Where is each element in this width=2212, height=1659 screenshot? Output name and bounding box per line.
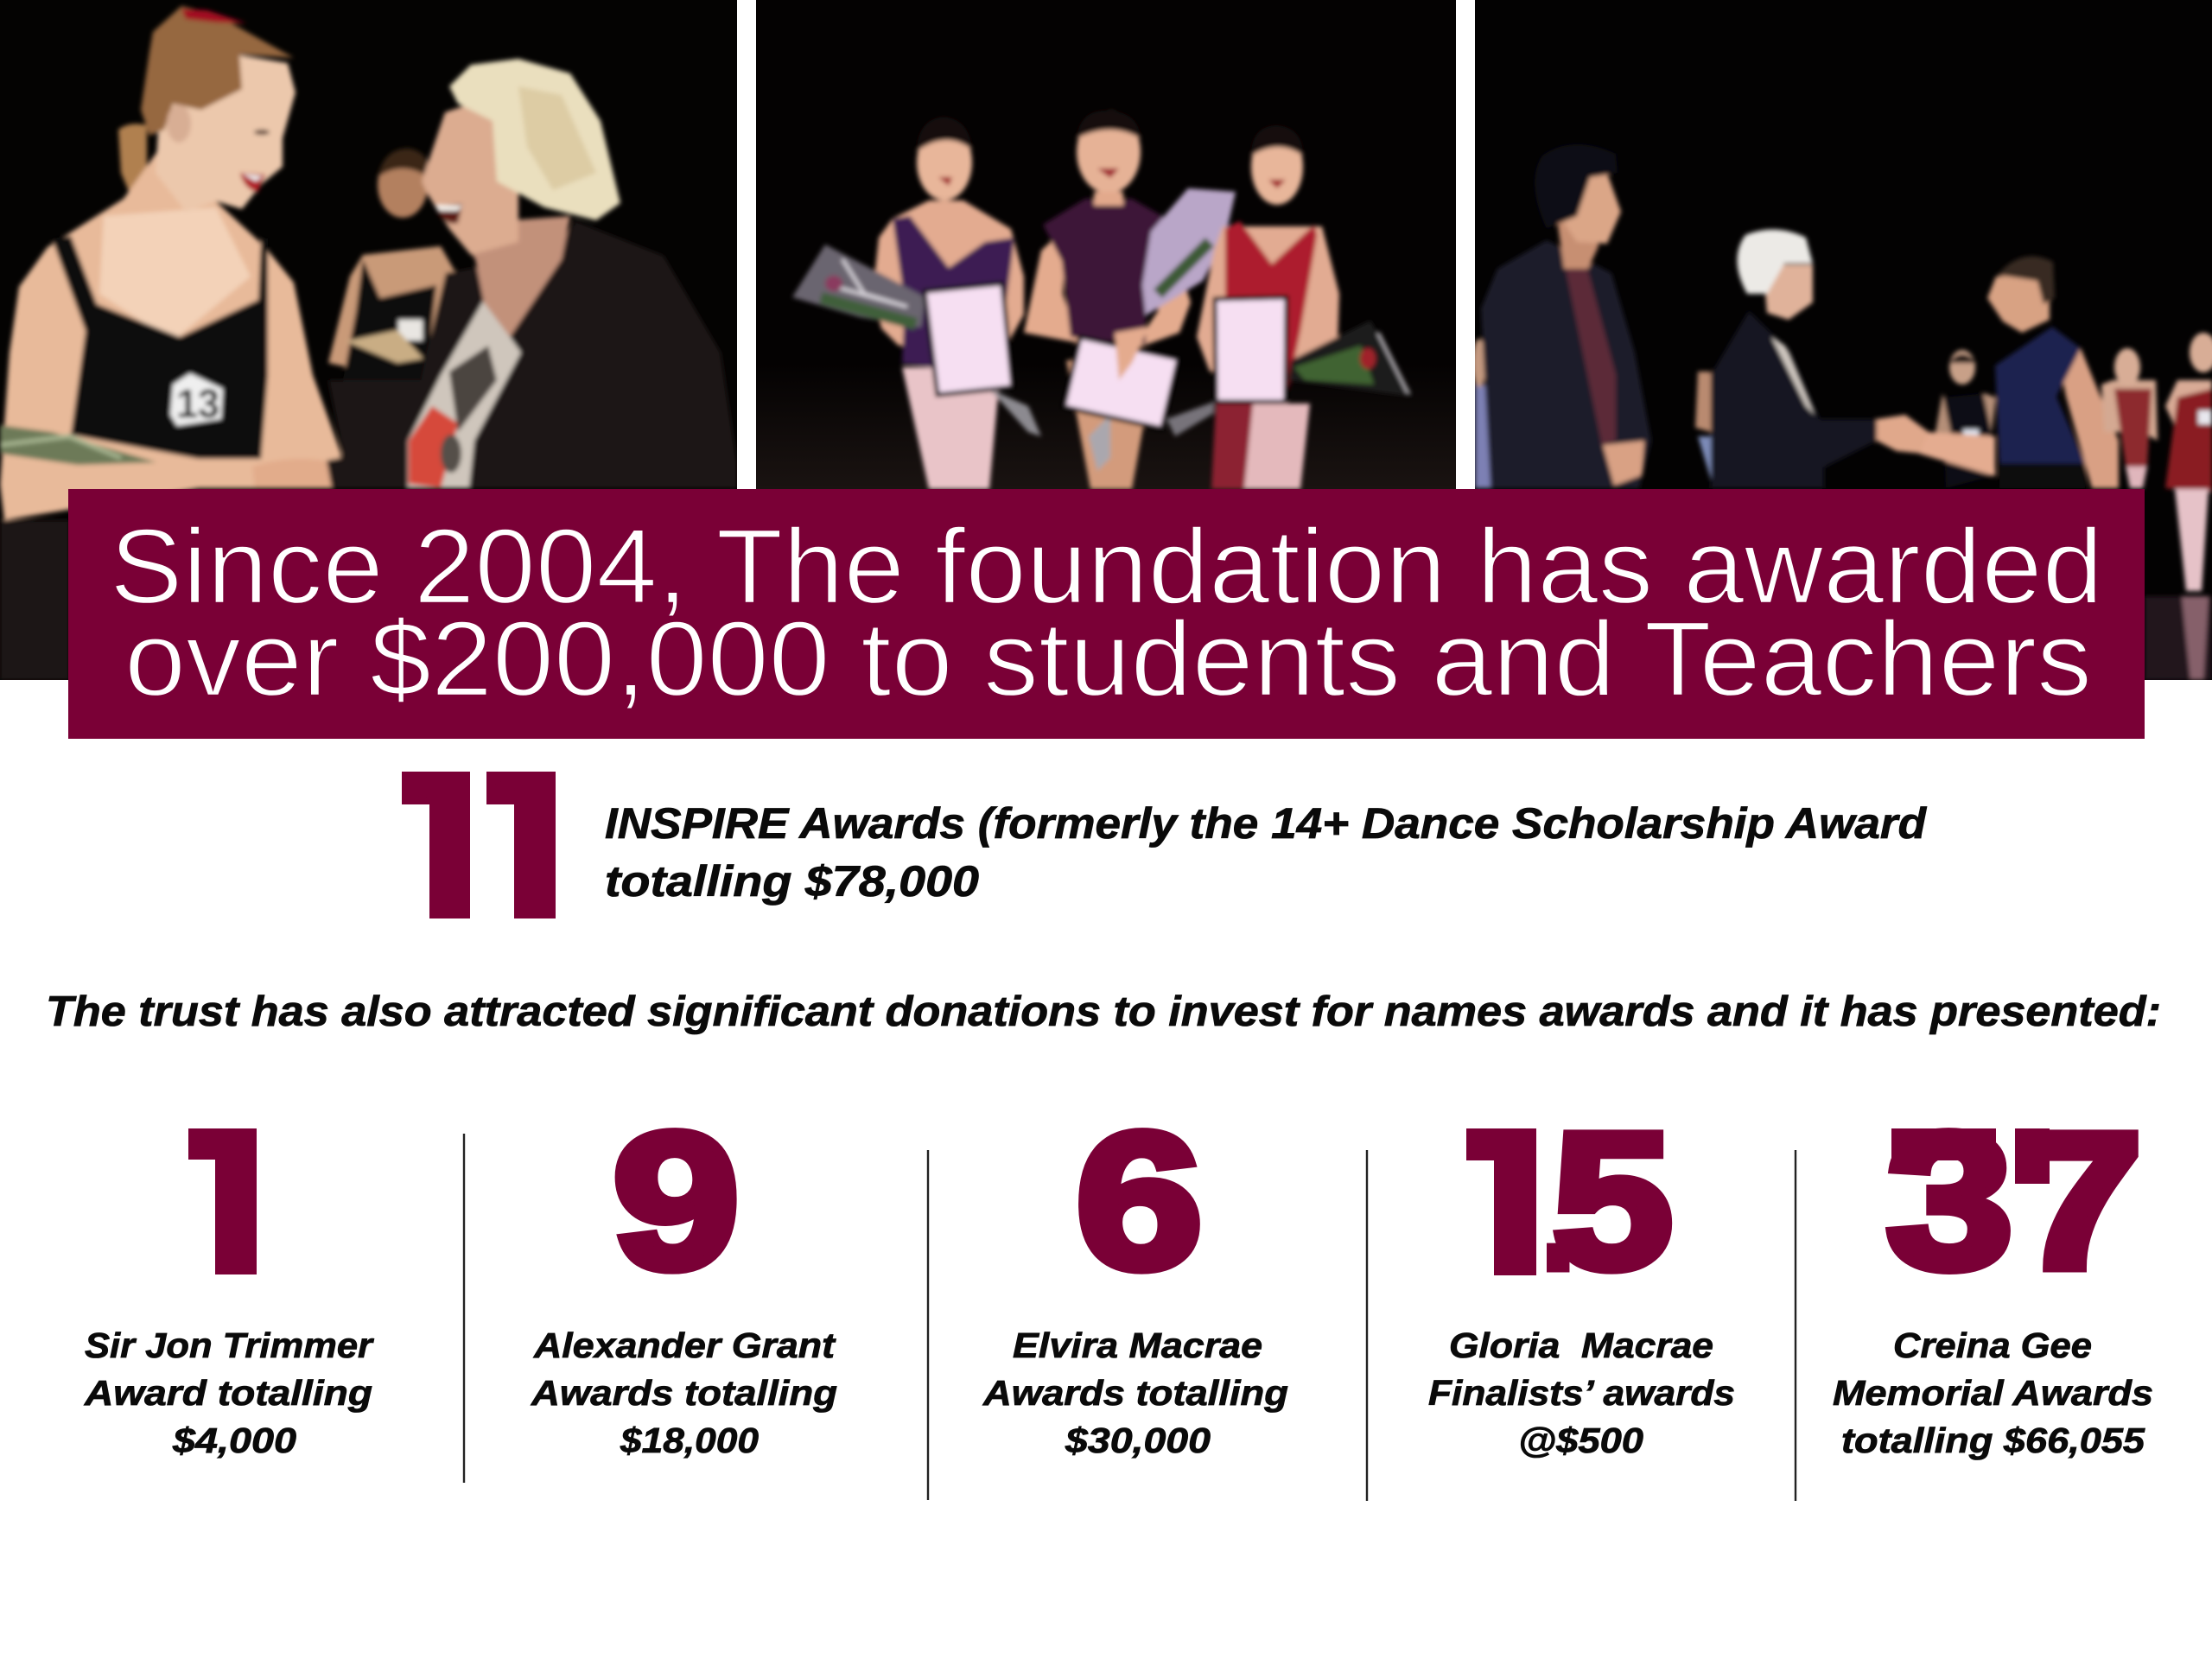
handshake xyxy=(1877,415,1929,454)
stat: Creina Gee: Creina Gee xyxy=(1893,1325,2092,1365)
stat: Alexander Grant: 9 xyxy=(613,1092,740,1309)
woman presenter xyxy=(1711,230,1877,488)
stat: Sir Jon Trimmer: $4,000 xyxy=(172,1421,296,1460)
stat: Sir Jon Trimmer: 1 xyxy=(167,1092,294,1309)
dancer black leotard xyxy=(52,236,268,459)
stat: Creina Gee: totalling $66,055 xyxy=(1841,1421,2145,1460)
photo: handshake on stage xyxy=(1472,0,2212,680)
headline xyxy=(110,508,2103,719)
certificate middle xyxy=(1064,337,1179,429)
elderly woman face xyxy=(422,99,518,255)
certificate left xyxy=(925,283,1013,395)
background dancer behind left xyxy=(118,124,147,194)
stat: Alexander Grant xyxy=(531,1092,837,1460)
stage floor reflection xyxy=(2145,596,2212,680)
elderly woman cardigan xyxy=(327,220,737,488)
dancer body xyxy=(0,138,341,520)
stat: Elvira Macrae: Awards totalling xyxy=(982,1373,1288,1413)
headline: over $200,000 to students and Teachers xyxy=(124,601,2092,719)
background dancer in black xyxy=(328,149,458,467)
stat: Creina Gee: 37 xyxy=(1886,1092,2143,1309)
stat: Elvira Macrae: Elvira Macrae xyxy=(1013,1325,1262,1365)
bouquet right xyxy=(1288,321,1413,397)
lower skirt xyxy=(0,520,69,680)
stat: Sir Jon Trimmer xyxy=(84,1092,374,1460)
stat: Alexander Grant: Awards totalling xyxy=(531,1373,837,1413)
stat: Sir Jon Trimmer: Sir Jon Trimmer xyxy=(85,1325,374,1365)
stat: Gloria Macrae: Finalists’ awards xyxy=(1428,1373,1735,1413)
hand on certificate xyxy=(1115,327,1149,380)
inspire awards text xyxy=(605,799,1928,906)
background dancer in black xyxy=(1936,350,1996,488)
stat: Sir Jon Trimmer: Award totalling xyxy=(84,1373,372,1413)
stat: Gloria Macrae xyxy=(1428,1093,1735,1460)
blouse xyxy=(408,300,521,488)
big number 11: 11 xyxy=(381,736,593,953)
white hair xyxy=(449,59,620,220)
stat: Alexander Grant: Alexander Grant xyxy=(533,1325,837,1365)
neck xyxy=(450,216,570,337)
right dancer xyxy=(1197,125,1339,489)
dancer face and hair xyxy=(156,54,296,212)
stat: Elvira Macrae: $30,000 xyxy=(1065,1421,1211,1460)
inspire awards text: INSPIRE Awards (formerly the 14+ Dance Scholarship Award xyxy=(605,799,1928,848)
certificate right xyxy=(1215,297,1287,402)
stat: Elvira Macrae xyxy=(982,1092,1288,1460)
man in suit xyxy=(1481,144,1651,488)
background dancers in red xyxy=(2101,333,2212,591)
stat: Elvira Macrae: 6 xyxy=(1076,1092,1203,1309)
trust statement: The trust has also attracted significant donations to invest for names awards and it has presented: xyxy=(46,988,2161,1035)
young man xyxy=(1987,257,2119,488)
stat: Gloria Macrae: @$500 xyxy=(1518,1421,1643,1460)
middle dancer xyxy=(1024,111,1236,489)
photo: young dancer and elderly patron laughing xyxy=(0,0,737,680)
banner xyxy=(68,489,2145,739)
left dancer xyxy=(792,117,1041,489)
photo: three dancers with certificates xyxy=(756,0,1456,489)
stat: Gloria Macrae: Gloria Macrae xyxy=(1449,1325,1713,1365)
stat: Gloria Macrae: 15 xyxy=(1450,1093,1673,1309)
bouquet stems xyxy=(0,425,156,465)
stat: Creina Gee: Memorial Awards xyxy=(1833,1373,2153,1413)
number tag: 13 xyxy=(176,381,219,426)
stat: Creina Gee xyxy=(1833,1092,2153,1460)
stat: Alexander Grant: $18,000 xyxy=(620,1421,759,1460)
background dancer behind woman xyxy=(1695,372,1711,432)
left background dancer sliver xyxy=(1475,381,1495,489)
headline: Since 2004, The foundation has awarded xyxy=(110,508,2103,626)
clasped hands xyxy=(252,459,335,488)
inspire awards text: totalling $78,000 xyxy=(605,857,979,906)
